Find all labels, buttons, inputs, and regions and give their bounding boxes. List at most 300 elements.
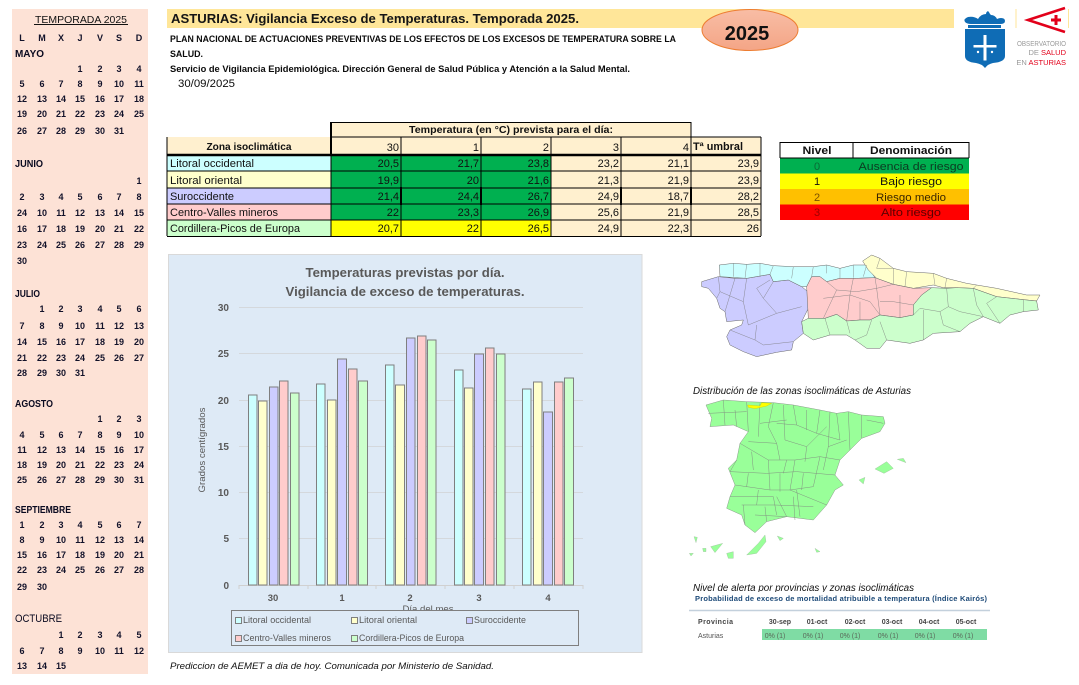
month: julio: 25: [95, 353, 105, 363]
month: octubre: 6: [19, 646, 25, 656]
map: Asturias isoclimatic zones: [702, 255, 1040, 357]
month: mayo: 9: [97, 79, 103, 89]
month: agosto: 7: [77, 430, 83, 440]
month: mayo: MAYO: [15, 49, 44, 60]
year badge: 2025: [725, 23, 769, 45]
month: junio: 17: [37, 224, 47, 234]
month: junio: 5: [77, 192, 83, 202]
temperature forecast table: 24,9: [598, 191, 619, 203]
temperature forecast table: 26,5: [528, 223, 549, 235]
month: agosto: 23: [114, 460, 124, 470]
month: mayo: 3: [116, 64, 122, 74]
month: septiembre: SEPTIEMBRE: [15, 505, 71, 516]
temperature forecast table: 24,9: [598, 223, 619, 235]
month: mayo: 7: [58, 79, 64, 89]
month: mayo: 11: [134, 79, 144, 89]
month: julio: 12: [114, 321, 124, 331]
month: septiembre: [15, 505, 144, 592]
month: septiembre: 27: [114, 565, 124, 575]
icon: Asturias coat of arms: [964, 11, 1005, 68]
risk level legend table: 3: [814, 207, 820, 219]
month: julio: 21: [17, 353, 27, 363]
bars: day 30: [248, 381, 299, 585]
Kairos mortality probability table: 0% (1): [878, 633, 898, 640]
caption: Asturias map: Distribución de las zonas isoclimáticas de Asturias: [693, 386, 911, 397]
month: septiembre: 28: [134, 565, 144, 575]
month: septiembre: 10: [56, 535, 66, 545]
temperature forecast table: 21,1: [668, 158, 689, 170]
temperature forecast table: 20,5: [378, 158, 399, 170]
zone: Centro-Valles mineros: [807, 277, 932, 321]
month: junio: 12: [75, 208, 85, 218]
risk level legend table: Ausencia de riesgo: [858, 161, 964, 173]
month: agosto: 2: [116, 414, 122, 424]
chart legend: Litoral occidental: [243, 615, 311, 625]
month: octubre: OCTUBRE: [15, 613, 62, 625]
weekday header: S: [116, 33, 122, 43]
month: julio: 23: [56, 353, 66, 363]
y axis labels: 15: [218, 442, 229, 453]
temperature forecast table: 20,7: [378, 223, 399, 235]
month: mayo: 16: [95, 94, 105, 104]
month: junio: 1: [136, 176, 142, 186]
month: mayo: [15, 49, 144, 136]
chart legend: Litoral oriental: [359, 615, 417, 625]
month: agosto: 8: [97, 430, 103, 440]
month: agosto: 27: [56, 475, 66, 485]
month: junio: 25: [56, 240, 66, 250]
month: septiembre: 21: [134, 550, 144, 560]
month: mayo: 14: [56, 94, 66, 104]
y axis labels: 25: [218, 349, 229, 360]
temperature forecast table: 4: [683, 142, 689, 154]
month: julio: 13: [134, 321, 144, 331]
month: julio: [15, 289, 144, 378]
month: junio: 27: [95, 240, 105, 250]
temperature forecast table: 18,7: [668, 191, 689, 203]
peninsula: [706, 400, 885, 533]
month: julio: 31: [75, 368, 85, 378]
month: septiembre: 19: [95, 550, 105, 560]
chart legend: [232, 610, 578, 646]
temperature forecast table: 3: [613, 142, 619, 154]
weekday header: V: [97, 33, 103, 43]
Kairos mortality probability table: 03-oct: [882, 619, 903, 626]
month: julio: JULIO: [15, 289, 40, 300]
month: mayo: 17: [114, 94, 124, 104]
month: agosto: 21: [75, 460, 85, 470]
month: agosto: 4: [19, 430, 25, 440]
islands: [689, 458, 906, 558]
month: agosto: 26: [37, 475, 47, 485]
month: junio: [15, 159, 144, 266]
month: agosto: 12: [37, 445, 47, 455]
risk level legend table: [780, 142, 969, 220]
month: julio: 28: [17, 368, 27, 378]
month: julio: 11: [95, 321, 105, 331]
month: mayo: 31: [114, 126, 124, 136]
y axis labels: 20: [218, 396, 229, 407]
bars: day 1: [316, 359, 368, 585]
temperature forecast table: 25,6: [598, 207, 619, 219]
x axis labels: 2: [407, 593, 413, 604]
month: junio: 20: [95, 224, 105, 234]
header band with title: [167, 9, 954, 28]
month: mayo: 2: [97, 64, 103, 74]
month: septiembre: 17: [56, 550, 66, 560]
month: junio: 13: [95, 208, 105, 218]
risk-coloured value cells: [331, 155, 761, 236]
month: octubre: 15: [56, 661, 66, 671]
weekday header: X: [58, 33, 64, 43]
month: octubre: 11: [114, 646, 124, 656]
month: junio: 21: [114, 224, 124, 234]
temperature forecast table: 21,7: [458, 158, 479, 170]
month: junio: 8: [136, 192, 142, 202]
month: octubre: 9: [77, 646, 83, 656]
month: octubre: 4: [116, 630, 122, 640]
bars: day 3: [454, 348, 505, 585]
temperature forecast table: 20: [467, 175, 479, 187]
y axis labels: 10: [218, 488, 229, 499]
temperature forecast table: 26,9: [528, 207, 549, 219]
month: mayo: 5: [19, 79, 25, 89]
month: agosto: 20: [56, 460, 66, 470]
month: septiembre: 24: [56, 565, 66, 575]
month: mayo: 23: [95, 109, 105, 119]
chart title: Temperaturas previstas por día.: [306, 265, 504, 280]
month: julio: 3: [77, 304, 83, 314]
x axis labels: 1: [339, 593, 345, 604]
month: agosto: [15, 399, 144, 485]
y axis labels: 0: [223, 581, 229, 592]
month: octubre: 14: [37, 661, 47, 671]
weekday header: D: [136, 33, 143, 43]
month: julio: 17: [75, 337, 85, 347]
temperature forecast table: 2: [543, 142, 549, 154]
temperature forecast table: Litoral oriental: [170, 175, 242, 187]
month: junio: JUNIO: [15, 159, 43, 170]
risk level legend table: 2: [814, 192, 820, 204]
temperature forecast table: Tª umbral: [693, 141, 743, 153]
month: agosto: 19: [37, 460, 47, 470]
month: julio: 5: [116, 304, 122, 314]
weekday header: M: [38, 33, 46, 43]
month: julio: 20: [134, 337, 144, 347]
risk level legend table: Nivel: [802, 145, 832, 157]
month: mayo: 6: [39, 79, 45, 89]
chart title: Vigilancia de exceso de temperaturas.: [286, 284, 524, 299]
Kairos mortality probability table: [689, 592, 991, 642]
temperature forecast table: 1: [473, 142, 479, 154]
risk level legend table: Denominación: [870, 145, 952, 157]
temperature forecast table: 30: [387, 142, 399, 154]
month: mayo: 8: [77, 79, 83, 89]
month: junio: 30: [17, 256, 27, 266]
month: octubre: [15, 613, 144, 671]
month: agosto: 24: [134, 460, 144, 470]
x axis labels: 30: [268, 593, 278, 604]
month: octubre: 5: [136, 630, 142, 640]
icon: Observatorio de Salud logo: EN ASTURIAS: [1016, 58, 1066, 67]
Kairos mortality probability table: 0% (1): [915, 633, 935, 640]
month: agosto: 29: [95, 475, 105, 485]
Kairos mortality probability table: 0% (1): [803, 633, 823, 640]
month: mayo: 18: [134, 94, 144, 104]
month: septiembre: 11: [75, 535, 85, 545]
month: agosto: 10: [134, 430, 144, 440]
month: julio: 9: [58, 321, 64, 331]
chart title: [286, 265, 524, 299]
temperature forecast table: 23,2: [598, 158, 619, 170]
caption: alert level: Nivel de alerta por provincias y zonas isoclimáticas: [693, 583, 914, 594]
month: septiembre: 8: [19, 535, 25, 545]
temperature forecast table: 21,4: [378, 191, 399, 203]
temperature forecast table: Temperatura (en °C) prevista para el día:: [409, 124, 613, 136]
month: agosto: 28: [75, 475, 85, 485]
header text block: 30/09/2025: [178, 78, 235, 90]
month: septiembre: 18: [75, 550, 85, 560]
temperature forecast table: [167, 122, 761, 236]
chart legend: Suroccidente: [474, 615, 526, 625]
month: mayo: 19: [17, 109, 27, 119]
month: julio: 6: [136, 304, 142, 314]
month: junio: 19: [75, 224, 85, 234]
month: junio: 14: [114, 208, 124, 218]
month: julio: 14: [17, 337, 27, 347]
y axis title: Grados centígrados: [197, 407, 208, 492]
temperature forecast table: 28,2: [738, 191, 759, 203]
x axis title: Día del mes: [402, 604, 454, 615]
month: mayo: 15: [75, 94, 85, 104]
month: septiembre: 3: [58, 520, 64, 530]
temperature forecast table: Cordillera-Picos de Europa: [170, 223, 301, 235]
temperature forecast table: Litoral occidental: [170, 158, 254, 170]
month: mayo: 4: [136, 64, 142, 74]
temperature forecast table: 23,3: [458, 207, 479, 219]
month: septiembre: 12: [95, 535, 105, 545]
temperature forecast table: 23,9: [738, 175, 759, 187]
temperature forecast table: 21,9: [668, 207, 689, 219]
month: septiembre: 13: [114, 535, 124, 545]
month: septiembre: 16: [37, 550, 47, 560]
month: septiembre: 2: [39, 520, 45, 530]
month: junio: 29: [134, 240, 144, 250]
y axis labels: [218, 303, 229, 592]
month: septiembre: 1: [19, 520, 25, 530]
month: septiembre: 6: [116, 520, 122, 530]
month: mayo: 13: [37, 94, 47, 104]
Kairos mortality probability table: 0% (1): [840, 633, 860, 640]
month: junio: 7: [116, 192, 122, 202]
temperature forecast table: 26,7: [528, 191, 549, 203]
month: junio: 16: [17, 224, 27, 234]
temperature forecast table: 26: [747, 223, 759, 235]
month: mayo: 21: [56, 109, 66, 119]
month: junio: 18: [56, 224, 66, 234]
x axis labels: 3: [476, 593, 482, 604]
Kairos mortality probability table: 04-oct: [919, 619, 940, 626]
x axis labels: [268, 593, 551, 604]
month: mayo: 27: [37, 126, 47, 136]
month: julio: 2: [58, 304, 64, 314]
Kairos mortality probability table: 0% (1): [953, 633, 973, 640]
temperature forecast table: Suroccidente: [170, 191, 234, 203]
month: octubre: 7: [39, 646, 45, 656]
temperature forecast table: 23,9: [738, 158, 759, 170]
month: julio: 1: [39, 304, 45, 314]
temperature forecast table: 22,3: [668, 223, 689, 235]
month: octubre: 12: [134, 646, 144, 656]
temperature forecast table: 21,3: [598, 175, 619, 187]
zone name cells: [167, 155, 331, 236]
temperature forecast table: 22: [387, 207, 399, 219]
chart legend: Cordillera-Picos de Europa: [359, 633, 464, 643]
month: octubre: 2: [77, 630, 83, 640]
bars: day 4: [522, 378, 574, 585]
Kairos mortality probability table: 0% (1): [765, 633, 785, 640]
x axis labels: 4: [545, 593, 551, 604]
Kairos mortality probability table: Probabilidad de exceso de mortalidad atribuible a temperatura (Índice Kairós): [695, 594, 988, 603]
month: junio: 23: [17, 240, 27, 250]
month: junio: 10: [37, 208, 47, 218]
temperature forecast table: 22: [467, 223, 479, 235]
month: septiembre: 9: [39, 535, 45, 545]
month: mayo: 22: [75, 109, 85, 119]
Kairos mortality probability table: 30-sep: [769, 619, 791, 626]
month: julio: 27: [134, 353, 144, 363]
month: agosto: 5: [39, 430, 45, 440]
month: agosto: AGOSTO: [15, 399, 53, 410]
Asturias highlighted: [748, 403, 772, 409]
temperature forecast table: 23,8: [528, 158, 549, 170]
month: septiembre: 4: [77, 520, 83, 530]
month: octubre: 8: [58, 646, 64, 656]
month: agosto: 31: [134, 475, 144, 485]
zone: Suroccidente: [702, 274, 810, 357]
month: junio: 24: [17, 208, 27, 218]
month: mayo: 12: [17, 94, 27, 104]
Kairos mortality probability table: 02-oct: [845, 619, 866, 626]
weekday header: [19, 33, 143, 43]
month: mayo: 29: [75, 126, 85, 136]
month: septiembre: 25: [75, 565, 85, 575]
month: agosto: 13: [56, 445, 66, 455]
month: agosto: 6: [58, 430, 64, 440]
temperature forecast table: 21,6: [528, 175, 549, 187]
month: junio: 2: [19, 192, 25, 202]
month: agosto: 14: [75, 445, 85, 455]
month: mayo: 30: [95, 126, 105, 136]
month: agosto: 15: [95, 445, 105, 455]
month: septiembre: 30: [37, 582, 47, 592]
month: septiembre: 26: [95, 565, 105, 575]
month: octubre: 1: [58, 630, 64, 640]
month: junio: 24: [37, 240, 47, 250]
month: junio: 11: [56, 208, 66, 218]
month: septiembre: 29: [17, 582, 27, 592]
risk level legend table: 1: [814, 176, 820, 188]
month: julio: 16: [56, 337, 66, 347]
risk level legend table: 0: [814, 161, 820, 173]
month: agosto: 25: [17, 475, 27, 485]
month: mayo: 1: [77, 64, 83, 74]
month: mayo: 25: [134, 109, 144, 119]
Kairos mortality probability table: 05-oct: [956, 619, 977, 626]
month: julio: 4: [97, 304, 103, 314]
panel: season calendar: [12, 9, 148, 674]
y axis labels: 5: [223, 534, 229, 545]
Kairos mortality probability table: 01-oct: [807, 619, 828, 626]
month: septiembre: 20: [114, 550, 124, 560]
month: septiembre: 22: [17, 565, 27, 575]
month: agosto: 3: [136, 414, 142, 424]
icon: Observatorio de Salud logo: OBSERVATORIO: [1017, 39, 1066, 48]
temperature forecast table: 28,5: [738, 207, 759, 219]
zone: Litoral occidental: [719, 263, 875, 287]
year badge: [702, 10, 798, 50]
map: Spain alert levels: [689, 400, 906, 558]
month: octubre: 13: [17, 661, 27, 671]
chart legend: Centro-Valles mineros: [243, 633, 331, 643]
month: julio: 15: [37, 337, 47, 347]
temperature forecast table: Zona isoclimática: [206, 141, 292, 153]
month: junio: 26: [75, 240, 85, 250]
month: junio: 22: [134, 224, 144, 234]
header text block: PLAN NACIONAL DE ACTUACIONES PREVENTIVAS DE LOS EFECTOS DE LOS EXCESOS DE TEMPERATURA SOBRE LA: [170, 34, 676, 45]
month: junio: 3: [39, 192, 45, 202]
header text block: Servicio de Vigilancia Epidemiológica. Dirección General de Salud Pública y Atención a la Salud Mental.: [170, 64, 630, 75]
month: mayo: 10: [114, 79, 124, 89]
zone: Litoral oriental: [863, 255, 1040, 301]
month: septiembre: 5: [97, 520, 103, 530]
month: octubre: 3: [97, 630, 103, 640]
month: junio: 6: [97, 192, 103, 202]
Kairos mortality probability table: Provincia: [698, 619, 733, 626]
header band with title: ASTURIAS: Vigilancia Exceso de Temperaturas. Temporada 2025.: [171, 11, 579, 26]
bars: day 2: [386, 336, 436, 585]
month: agosto: 9: [116, 430, 122, 440]
icon: Observatorio de Salud logo: [1016, 8, 1068, 67]
weekday header: L: [19, 33, 25, 43]
risk level legend table: Bajo riesgo: [880, 176, 942, 188]
month: julio: 24: [75, 353, 85, 363]
month: julio: 26: [114, 353, 124, 363]
footnote: Prediccion de AEMET a dia de hoy. Comunicada por Ministerio de Sanidad.: [170, 661, 494, 672]
panel: bar chart of forecast temperatures: [168, 254, 642, 652]
icon: Observatorio de Salud logo: DE SALUD: [1028, 48, 1067, 57]
temperature forecast table: Centro-Valles mineros: [170, 207, 278, 219]
month: septiembre: 23: [37, 565, 47, 575]
temperature forecast table: 21,9: [668, 175, 689, 187]
month: junio: 15: [134, 208, 144, 218]
month: mayo: 20: [37, 109, 47, 119]
month: agosto: 30: [114, 475, 124, 485]
month: julio: 18: [95, 337, 105, 347]
month: mayo: 26: [17, 126, 27, 136]
month: mayo: 28: [56, 126, 66, 136]
month: agosto: 1: [97, 414, 103, 424]
risk level legend table: Alto riesgo: [881, 207, 941, 219]
month: agosto: 17: [134, 445, 144, 455]
temperature forecast table: 24,4: [458, 191, 479, 203]
month: septiembre: 7: [136, 520, 142, 530]
month: mayo: 24: [114, 109, 124, 119]
month: julio: 19: [114, 337, 124, 347]
header text block: SALUD.: [170, 49, 203, 60]
month: agosto: 11: [17, 445, 27, 455]
temperature forecast table: 19,9: [378, 175, 399, 187]
